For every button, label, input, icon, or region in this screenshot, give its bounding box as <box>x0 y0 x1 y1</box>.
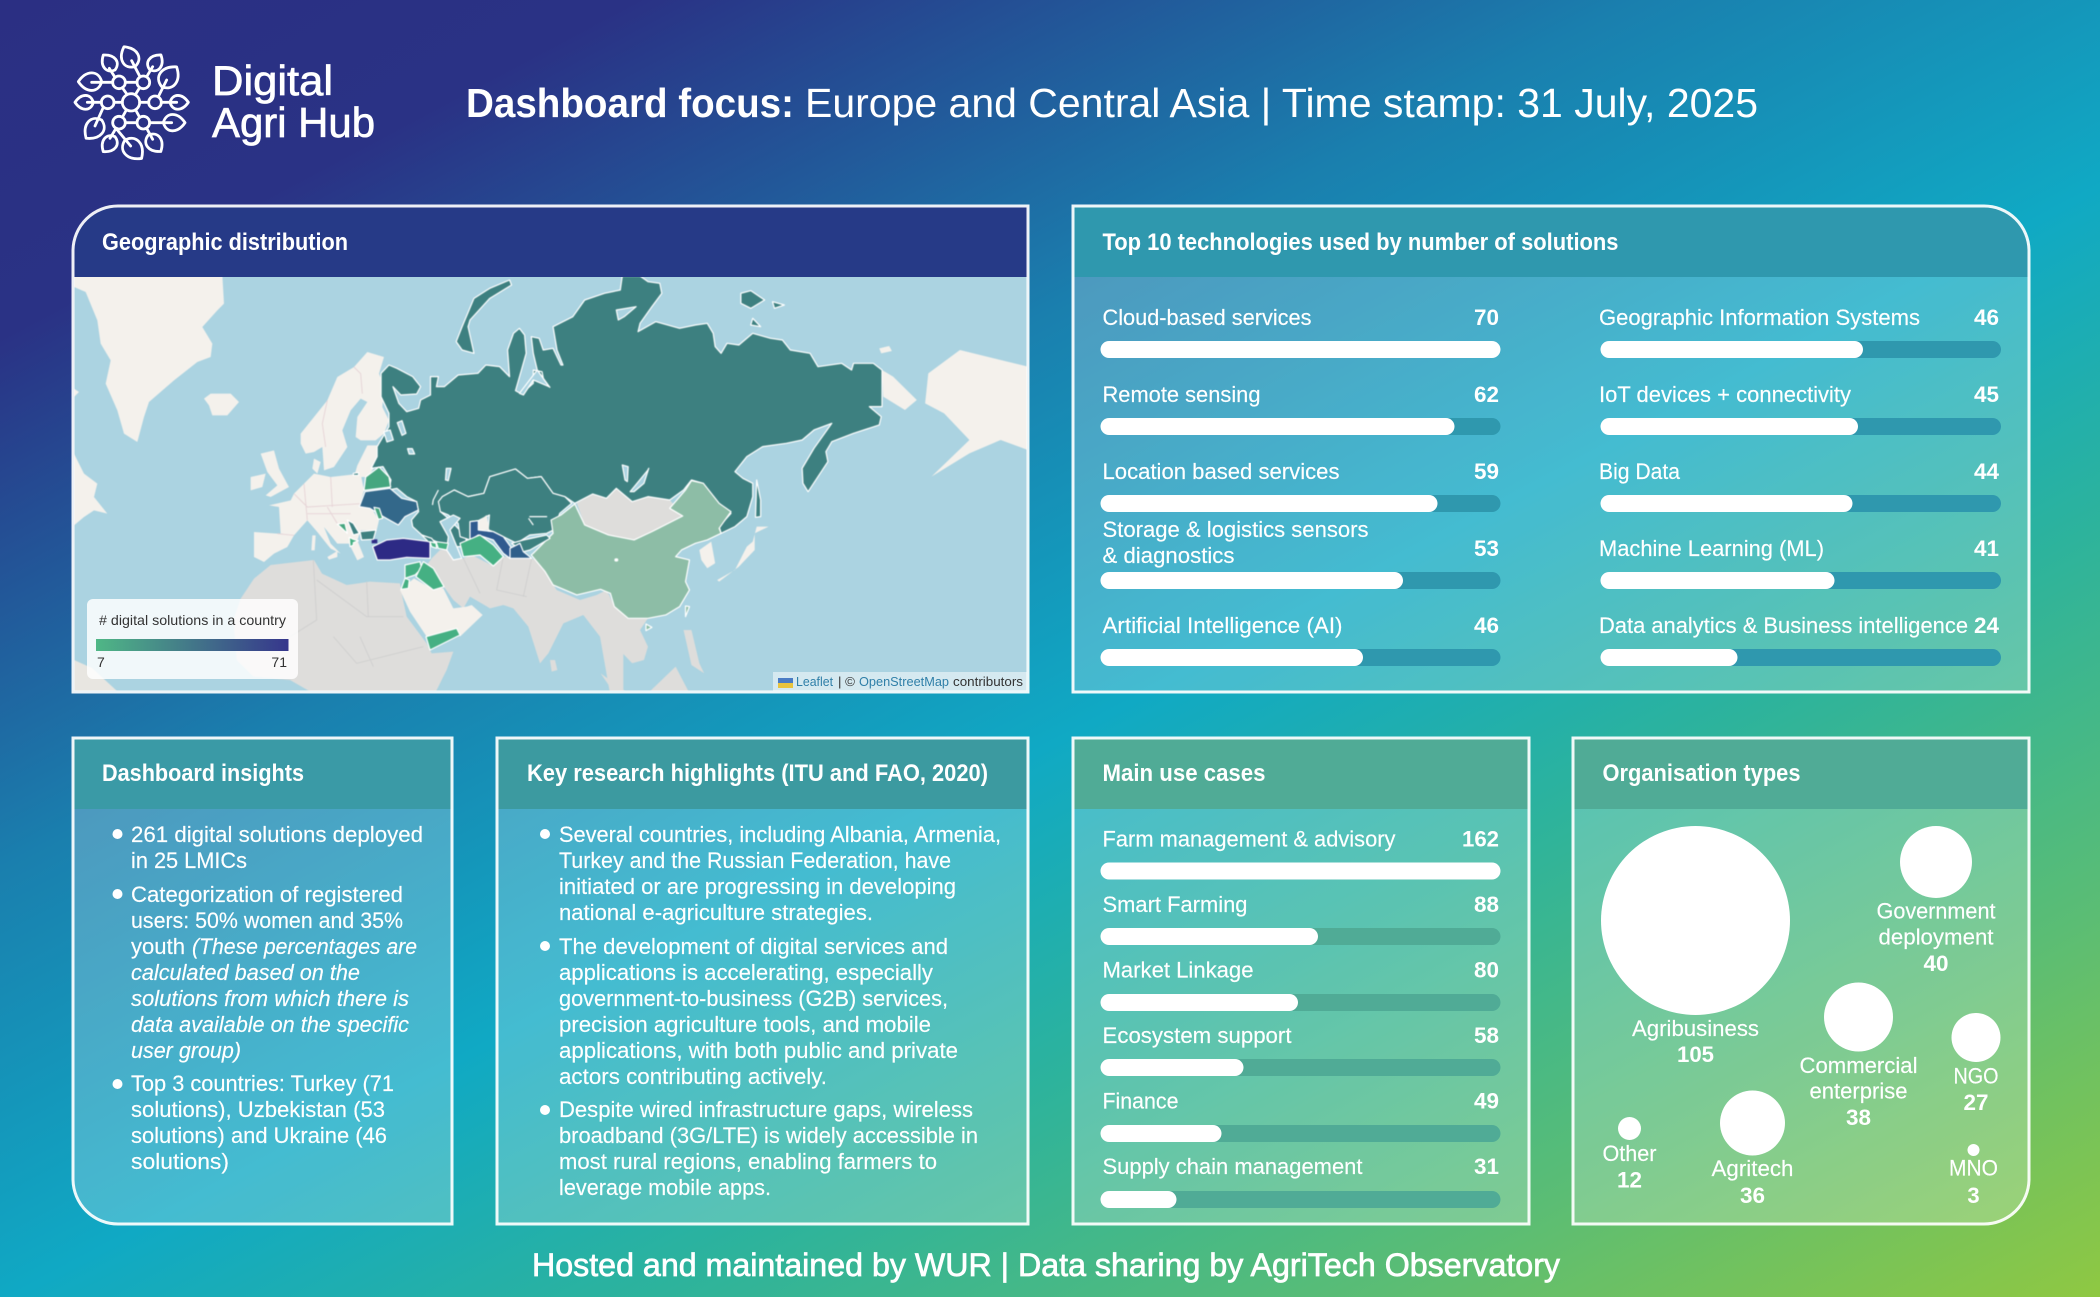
Other 12 <box>1602 1117 1656 1192</box>
Commercial enterprise 38 <box>1800 982 1918 1130</box>
Moldova <box>374 507 383 519</box>
Location based services: 59 <box>1474 459 1499 484</box>
text block: insights list: solutions from which there is <box>131 986 409 1011</box>
Machine Learning (ML): 41 <box>1974 536 1999 561</box>
Government deployment 40 <box>1876 826 1996 976</box>
Government deployment 40: 40 <box>1924 951 1948 976</box>
bubble chart <box>1601 826 2000 1208</box>
Yemen <box>426 628 460 650</box>
logo: Digital Agri Hub <box>75 43 375 165</box>
text block: research list: national e-agriculture strategies. <box>559 900 873 925</box>
Iraq <box>416 562 444 590</box>
panel: organisation types <box>1573 738 2029 1224</box>
Geographic Information Systems: Geographic Information Systems <box>1599 305 1920 330</box>
Syria <box>405 562 422 578</box>
Big Data <box>1599 459 2001 512</box>
Data analytics & Business intelligence: Data analytics & Business intelligence <box>1599 613 1968 638</box>
Agritech 36: 36 <box>1740 1183 1765 1208</box>
heading: Dashboard insights <box>102 760 304 787</box>
Supply chain management <box>1100 1154 1500 1208</box>
text block: insights list: Categorization of registered <box>131 882 403 907</box>
Remote sensing: Remote sensing <box>1102 382 1260 407</box>
logo wordmark: Agri Hub <box>212 99 375 146</box>
Farm management & advisory: Farm management & advisory <box>1102 826 1396 852</box>
panel: top 10 technologies <box>1073 206 2029 692</box>
text block: research list: Several countries, including Albania, Armenia, <box>559 822 1001 847</box>
Storage & logistics sensors & diagnostics: Storage & logistics sensors <box>1102 517 1368 542</box>
Remote sensing: 62 <box>1474 382 1499 407</box>
text block: insights list: solutions) <box>131 1149 229 1174</box>
Location based services <box>1100 459 1500 512</box>
Storage & logistics sensors & diagnostics <box>1100 517 1500 589</box>
heading: Main use cases <box>1102 760 1266 787</box>
Finance: Finance <box>1102 1088 1178 1114</box>
panel: main use cases <box>1073 738 1529 1224</box>
logo wordmark: Digital <box>212 57 333 104</box>
Aral basin <box>478 515 489 530</box>
east Asia land traced at zoom scale <box>353 276 1028 693</box>
Agribusiness 105: Agribusiness <box>1632 1016 1759 1041</box>
Other 12: 12 <box>1617 1168 1642 1192</box>
bar chart: right column <box>1599 305 2001 666</box>
map <box>74 275 1029 693</box>
text block: research list: precision agriculture tools, and mobile <box>559 1012 931 1037</box>
Kazakhstan <box>438 469 572 543</box>
Artificial Intelligence (AI) <box>1100 613 1500 666</box>
western land traced at 3x <box>74 275 389 562</box>
IoT devices + connectivity: IoT devices + connectivity <box>1599 382 1851 407</box>
panel header <box>497 738 1028 809</box>
legend: 71 <box>271 654 287 670</box>
Smart Farming <box>1100 892 1500 945</box>
text block: research list: Despite wired infrastructure gaps, wireless <box>559 1097 973 1122</box>
Commercial enterprise 38: enterprise <box>1810 1078 1908 1104</box>
logo wordmark <box>212 57 375 146</box>
Commercial enterprise 38: Commercial <box>1800 1053 1918 1078</box>
south atlantic land <box>74 660 117 691</box>
Turkey <box>373 538 430 560</box>
Cloud-based services: 70 <box>1474 305 1499 330</box>
panel header <box>1073 738 1529 809</box>
NGO 27: 27 <box>1964 1090 1988 1115</box>
title: Dashboard focus: <box>466 80 794 126</box>
Artificial Intelligence (AI): Artificial Intelligence (AI) <box>1102 613 1342 638</box>
Finance <box>1100 1088 1500 1142</box>
panel header <box>1073 206 2029 277</box>
text block: insights list: data available on the specific <box>131 1012 409 1037</box>
west and central Asia countries traced at 3x <box>337 488 550 650</box>
icon: leaf network emblem <box>75 43 188 165</box>
text block: research list: government-to-business (G2B) services, <box>559 986 948 1011</box>
MNO 3 <box>1949 1144 1998 1208</box>
Storage & logistics sensors & diagnostics: & diagnostics <box>1102 543 1234 568</box>
text block: research list <box>540 822 1001 1200</box>
Market Linkage <box>1100 958 1500 1011</box>
NGO 27: NGO <box>1954 1064 1998 1088</box>
Middle East, Africa and South Asia traced at 3x <box>233 550 623 693</box>
legend <box>87 599 298 679</box>
title: Europe and Central Asia | Time stamp: 31 July, 2025 <box>805 80 1758 126</box>
text block: insights list: youth <box>131 934 185 959</box>
Big Data: Big Data <box>1599 459 1681 484</box>
Government deployment 40: Government <box>1876 898 1996 924</box>
panel: geographic distribution <box>73 206 1029 693</box>
heading: Key research highlights (ITU and FAO, 2020) <box>527 760 988 787</box>
Commercial enterprise 38: 38 <box>1846 1105 1871 1130</box>
Tajikistan <box>510 543 532 558</box>
Machine Learning (ML) <box>1599 536 2001 589</box>
text block: insights list: in 25 LMICs <box>131 848 247 873</box>
Ecosystem support: Ecosystem support <box>1102 1023 1292 1048</box>
heading: Organisation types <box>1602 760 1800 787</box>
footer: Hosted and maintained by WUR | Data sharing by AgriTech Observatory <box>532 1247 1560 1283</box>
attribution: | © <box>838 674 855 689</box>
Finance: 49 <box>1474 1088 1499 1114</box>
NGO 27 <box>1952 1013 2000 1115</box>
lakes <box>384 430 393 442</box>
attribution <box>773 672 1029 691</box>
Machine Learning (ML): Machine Learning (ML) <box>1599 536 1824 561</box>
Agribusiness 105: 105 <box>1677 1042 1714 1067</box>
Remote sensing <box>1100 382 1500 435</box>
text block: research list: Turkey and the Russian Federation, have <box>559 848 951 873</box>
heading: Top 10 technologies used by number of solutions <box>1102 229 1618 256</box>
text block: insights list: user group) <box>131 1038 241 1063</box>
Big Data: 44 <box>1974 459 2000 484</box>
Farm management & advisory <box>1100 826 1500 880</box>
Cloud-based services <box>1100 305 1500 358</box>
Geographic Information Systems <box>1599 305 2001 358</box>
Russia <box>371 276 882 547</box>
Agribusiness 105 <box>1601 826 1790 1067</box>
Kyrgyzstan <box>512 535 550 552</box>
text block: research list: initiated or are progressing in developing <box>559 874 956 899</box>
Other 12: Other <box>1602 1141 1656 1166</box>
Supply chain management: 31 <box>1474 1154 1499 1179</box>
Market Linkage: Market Linkage <box>1102 958 1254 982</box>
Government deployment 40: deployment <box>1878 924 1994 950</box>
panel: key research highlights <box>497 738 1028 1224</box>
Storage & logistics sensors & diagnostics: 53 <box>1474 536 1499 561</box>
panel: dashboard insights <box>73 738 452 1224</box>
text block: insights list: calculated based on the <box>131 960 360 985</box>
text block: insights list: solutions) and Ukraine (46 <box>131 1123 387 1148</box>
Farm management & advisory: 162 <box>1462 826 1499 852</box>
MNO 3: MNO <box>1949 1156 1998 1180</box>
attribution: OpenStreetMap <box>859 674 949 689</box>
text block: research list: leverage mobile apps. <box>559 1175 771 1200</box>
panel header <box>73 738 452 809</box>
text block: research list: applications is accelerating, especially <box>559 960 933 985</box>
IoT devices + connectivity: 45 <box>1974 382 1999 407</box>
Agritech 36 <box>1712 1090 1794 1208</box>
Geographic Information Systems: 46 <box>1974 305 1999 330</box>
panel header <box>1573 738 2029 809</box>
Ecosystem support: 58 <box>1474 1023 1499 1048</box>
text block: insights list: users: 50% women and 35% <box>131 908 403 933</box>
Smart Farming: 88 <box>1474 892 1499 917</box>
legend: # digital solutions in a country <box>99 612 286 628</box>
Ecosystem support <box>1100 1023 1500 1076</box>
Agritech 36: Agritech <box>1712 1156 1794 1181</box>
bar chart: left column <box>1100 305 1500 666</box>
Turkmenistan <box>460 535 503 566</box>
text block: insights list: 261 digital solutions deployed <box>131 822 423 847</box>
text block: research list: applications, with both public and private <box>559 1038 958 1063</box>
Smart Farming: Smart Farming <box>1102 892 1248 917</box>
text block: research list: most rural regions, enabling farmers to <box>559 1149 937 1174</box>
panel header <box>73 206 1028 277</box>
attribution: contributors <box>953 674 1024 689</box>
Caspian Sea <box>440 515 462 560</box>
legend: 7 <box>97 654 105 670</box>
text block: insights list: solutions), Uzbekistan (53 <box>131 1097 385 1122</box>
China <box>531 481 731 618</box>
MNO 3: 3 <box>1967 1183 1980 1208</box>
Supply chain management: Supply chain management <box>1102 1154 1362 1179</box>
Data analytics & Business intelligence <box>1599 613 2001 666</box>
IoT devices + connectivity <box>1599 382 2001 435</box>
text block: research list: broadband (3G/LTE) is widely accessible in <box>559 1123 978 1148</box>
text block: insights list <box>112 822 423 1174</box>
text block: research list: The development of digital services and <box>559 934 948 959</box>
Artificial Intelligence (AI): 46 <box>1474 613 1499 638</box>
heading: Geographic distribution <box>102 229 348 256</box>
Balkans <box>337 523 347 533</box>
Cloud-based services: Cloud-based services <box>1102 305 1312 330</box>
text block: insights list: Top 3 countries: Turkey (71 <box>131 1071 394 1096</box>
text block: insights list: (These percentages are <box>192 934 417 959</box>
Belarus <box>364 467 391 490</box>
Caucasus <box>422 535 435 543</box>
text block: research list: actors contributing actively. <box>559 1064 827 1089</box>
Location based services: Location based services <box>1102 459 1340 484</box>
Market Linkage: 80 <box>1474 958 1499 982</box>
Data analytics & Business intelligence: 24 <box>1974 613 2000 638</box>
Uzbekistan <box>470 521 512 558</box>
bar chart: use cases <box>1100 826 1500 1208</box>
Jordan <box>401 578 409 589</box>
attribution: Leaflet <box>796 674 833 689</box>
Ukraine <box>359 488 418 525</box>
